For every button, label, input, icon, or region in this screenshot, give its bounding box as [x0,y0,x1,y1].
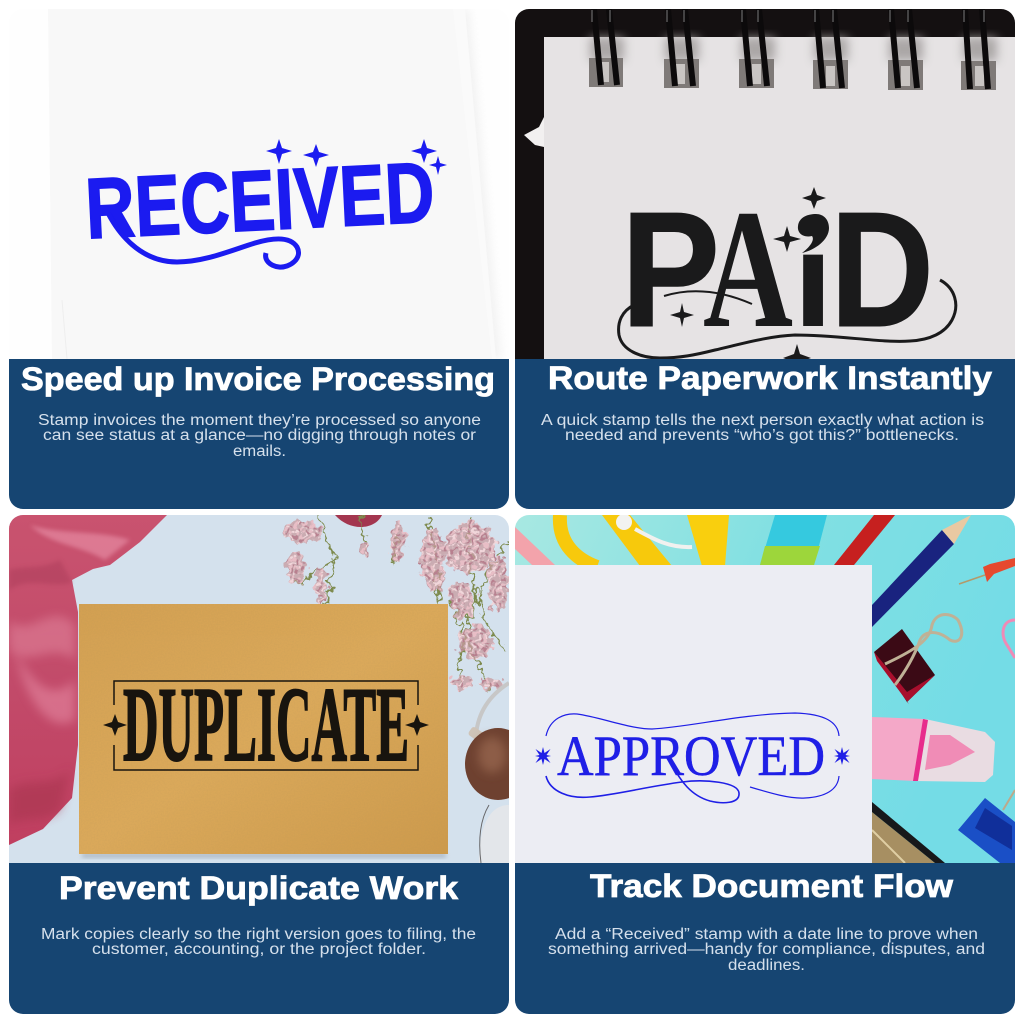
body text: Stamp invoices the moment they’re processed so anyone [38,412,481,429]
flower sprays [282,515,509,690]
push pin [959,558,1015,584]
red binder clip [874,615,962,704]
heading: Route Paperwork Instantly [548,360,992,396]
highlighter [872,717,995,782]
body text [548,928,984,970]
panel: route paperwork instantly [515,9,1015,509]
body text: emails. [233,443,286,460]
photo: spiral notebook [515,9,1015,359]
body text: A quick stamp tells the next person exactly what action is [541,412,984,429]
stamp: APPROVED: APPROVED [557,725,825,788]
kettle and plate [465,681,509,863]
photo: kraft card with fabric and flowers [9,515,531,863]
caption band [515,863,1015,1014]
stamp: PAID: D [830,178,934,361]
heading: Speed up Invoice Processing [21,361,495,397]
pink fabric [9,515,167,845]
stamp: DUPLICATE [103,680,429,771]
stamp: APPROVED [535,713,850,803]
body text [38,414,480,456]
heading: Prevent Duplicate Work [59,870,458,906]
body text: deadlines. [728,957,805,974]
body text: can see status at a glance—no digging through notes or [43,427,476,444]
caption band [9,359,509,509]
panel: prevent duplicate work [9,515,531,1014]
body text [41,926,476,958]
spiral rings [594,9,988,89]
heading: Track Document Flow [590,868,953,904]
stamp: PAID: A [703,175,793,363]
photo: white paper sheets [62,12,499,359]
stamp: PAID: P [621,178,720,361]
body text: customer, accounting, or the project folder. [92,941,426,958]
panel: track document flow [515,514,1015,1014]
caption band [515,359,1015,509]
panel: prevent duplicate work: DUPLICATE [123,666,409,783]
stamp: PAID: ı [793,204,833,355]
body text [541,412,984,444]
stamp: PAID [617,187,958,359]
panel: speed up invoice processing [9,9,509,509]
notebook corner [872,802,945,863]
stamp: RECEIVED: RECEIVED [83,145,437,257]
blue binder clip [958,790,1015,863]
body text: Mark copies clearly so the right version goes to filing, the [41,926,476,943]
caption band [9,863,509,1014]
body text: something arrived—handy for compliance, disputes, and [548,941,985,958]
body text: needed and prevents “who’s got this?” bottlenecks. [565,427,959,444]
body text: Add a “Received” stamp with a date line to prove when [555,926,978,943]
photo: stationery on aqua desk [515,514,1015,863]
